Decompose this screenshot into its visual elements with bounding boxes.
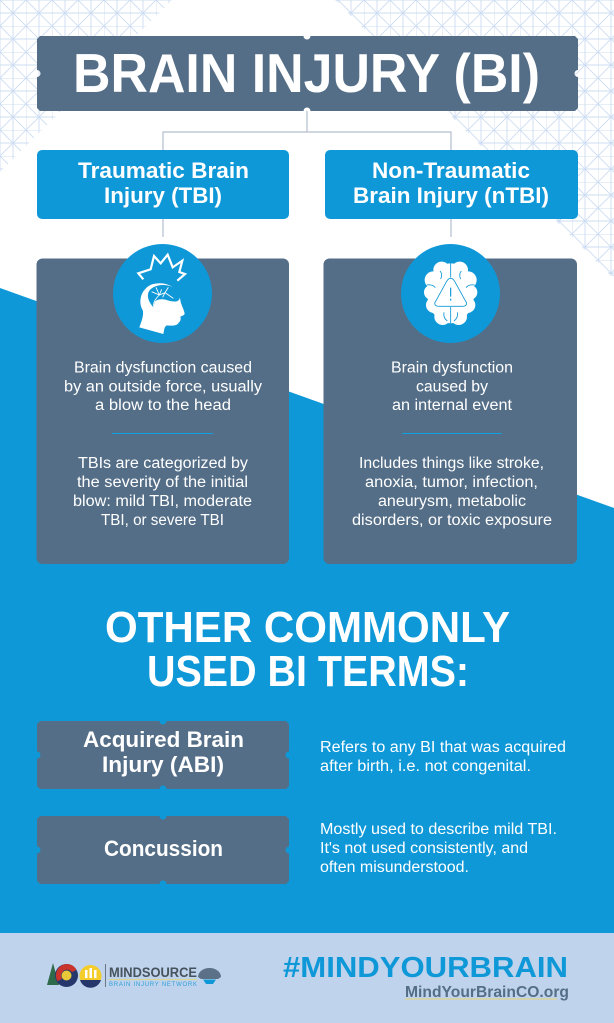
header: traumatic brain injury: Injury (TBI) xyxy=(104,183,222,208)
text: nTBI examples: Includes things like stroke, xyxy=(359,455,544,472)
panel: nTBI xyxy=(324,244,577,564)
connector lines xyxy=(163,111,451,237)
text: nTBI definition: caused by xyxy=(416,378,488,396)
text: nTBI examples xyxy=(352,455,552,529)
text: concussion description: often misunderstood. xyxy=(320,859,469,876)
logo: MindSource Brain Injury Network: MINDSOURCE xyxy=(109,965,197,980)
text: ABI description: after birth, i.e. not congenital. xyxy=(320,758,531,775)
term box: concussion xyxy=(37,816,289,884)
header: traumatic brain injury: Traumatic Brain xyxy=(78,158,249,183)
header: non-traumatic brain injury: Brain Injury (nTBI) xyxy=(353,183,549,208)
text: nTBI definition xyxy=(391,360,513,414)
text: TBI definition xyxy=(64,360,262,414)
text: nTBI definition: Brain dysfunction xyxy=(391,360,513,376)
text: concussion description: Mostly used to describe mild TBI. xyxy=(320,821,557,838)
footer band xyxy=(0,933,614,1023)
text: TBI categories: blow: mild TBI, moderate xyxy=(73,493,252,510)
heading: other commonly used BI terms: USED BI TERMS: xyxy=(147,647,469,696)
term box: concussion: Concussion xyxy=(104,836,223,861)
text: TBI definition: by an outside force, usually xyxy=(64,378,262,396)
logo: Colorado and CDHS marks xyxy=(47,963,102,988)
text: TBI definition: Brain dysfunction caused xyxy=(74,360,252,376)
text: TBI categories: the severity of the initial xyxy=(77,474,248,491)
text: concussion description: It's not used consistently, and xyxy=(320,840,528,857)
heading: other commonly used BI terms: OTHER COMMONLY xyxy=(105,603,510,652)
text: nTBI examples: disorders, or toxic exposure xyxy=(352,512,552,529)
title: BRAIN INJURY (BI) xyxy=(73,42,540,104)
text: concussion description xyxy=(320,821,557,876)
text: nTBI examples: anoxia, tumor, infection, xyxy=(365,474,538,491)
heading: other commonly used BI terms xyxy=(105,603,510,696)
term box: acquired brain injury xyxy=(37,721,289,789)
title banner xyxy=(37,36,578,111)
icon: brain with warning triangle xyxy=(401,244,500,343)
header: traumatic brain injury xyxy=(37,150,289,219)
text: TBI categories xyxy=(73,455,252,529)
text: nTBI examples: aneurysm, metabolic xyxy=(378,493,526,510)
logo: MindSource Brain Injury Network xyxy=(105,964,221,988)
term box: acquired brain injury: Acquired Brain xyxy=(83,727,244,752)
header: non-traumatic brain injury xyxy=(325,150,578,219)
logo: MindSource Brain Injury Network: BRAIN INJURY NETWORK xyxy=(109,982,197,988)
panel: TBI xyxy=(36,244,289,564)
header: non-traumatic brain injury: Non-Traumatic xyxy=(372,158,530,183)
hashtag: mind your brain: #MINDYOURBRAIN xyxy=(283,952,568,984)
term box: acquired brain injury: Injury (ABI) xyxy=(102,752,224,777)
text: nTBI definition: an internal event xyxy=(392,397,513,414)
text: ABI description xyxy=(320,739,566,775)
text: TBI categories: TBIs are categorized by xyxy=(78,455,248,472)
website link: MindYourBrainCO.org xyxy=(405,984,569,1001)
text: ABI description: Refers to any BI that was acquired xyxy=(320,739,566,756)
icon: head with burst xyxy=(113,244,212,343)
text: TBI categories: TBI, or severe TBI xyxy=(101,512,224,529)
text: TBI definition: a blow to the head xyxy=(95,397,231,414)
blue diagonal background xyxy=(0,288,614,933)
